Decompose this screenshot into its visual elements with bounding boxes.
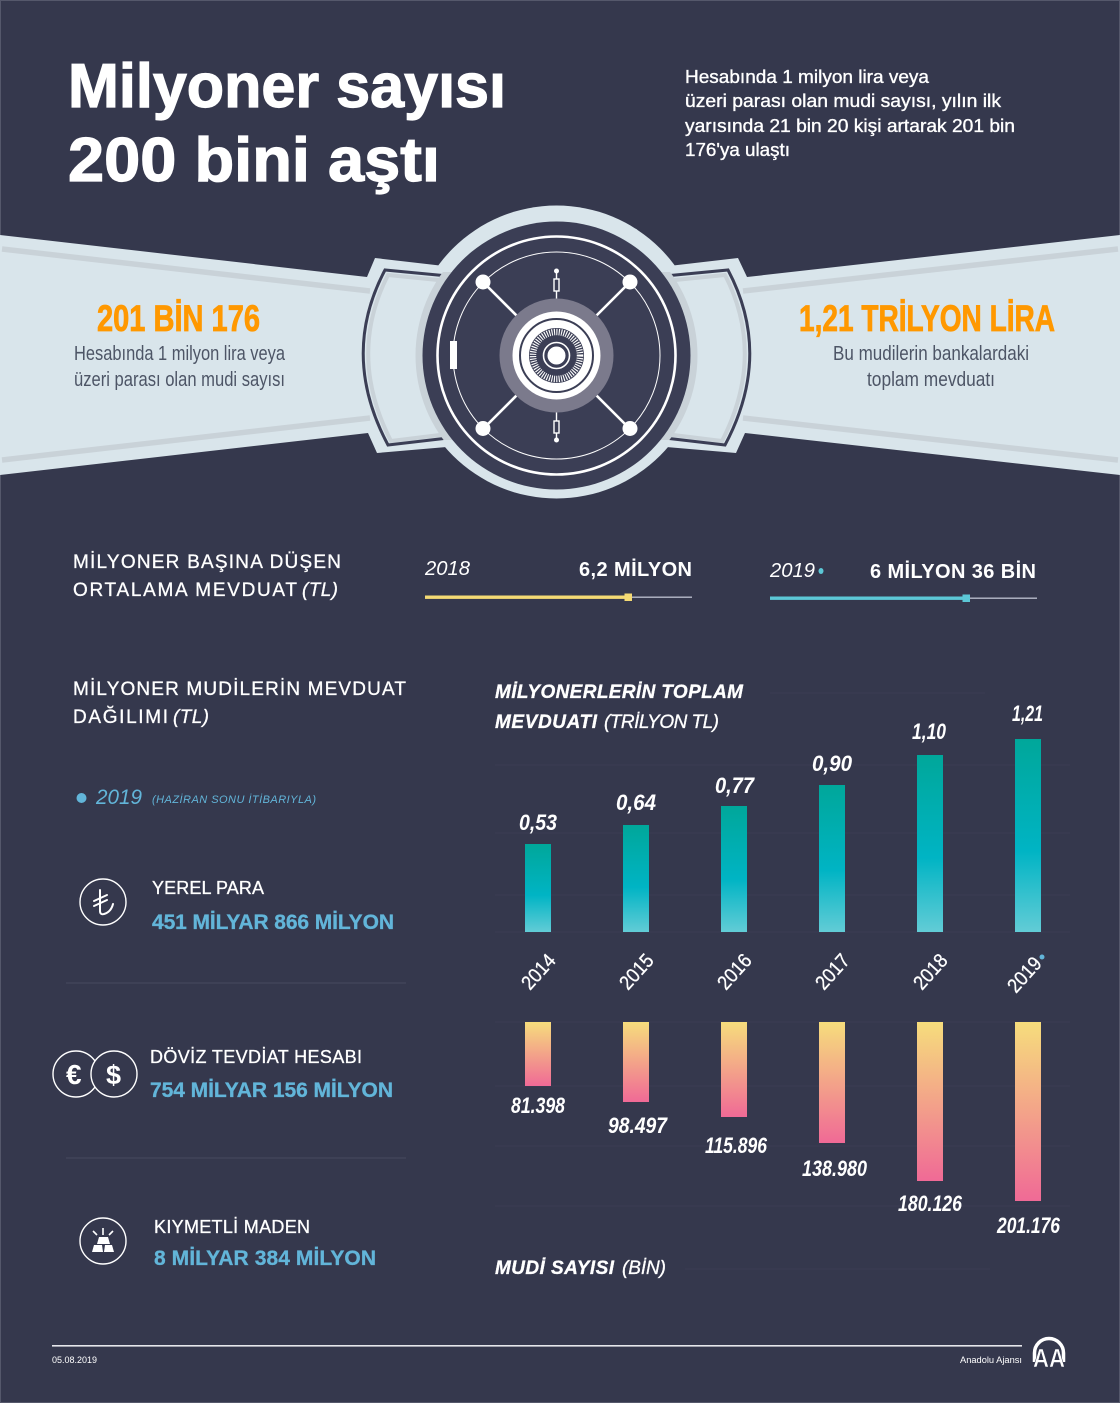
item: foreign currency: DÖVİZ TEVDİAT HESABI [150, 1047, 362, 1067]
bar chart: total deposits: 0,64 [616, 790, 656, 815]
heading: total deposits: MİLYONERLERİN TOPLAM [495, 682, 744, 703]
bar chart: total deposits: 1,21 [1012, 701, 1043, 726]
bar chart: depositor count: 115.896 [705, 1133, 768, 1158]
item: local currency: 451 MİLYAR 866 MİLYON [152, 911, 394, 934]
title [68, 52, 506, 195]
left band [0, 235, 470, 475]
left stat: Hesabında 1 milyon lira veya [74, 343, 286, 365]
heading: depositor count: MUDİ SAYISI [495, 1258, 615, 1279]
year axis labels [517, 950, 1046, 997]
icon: vault door [422, 222, 690, 490]
slider: 2018: 2018 [424, 558, 470, 580]
intro text: Hesabında 1 milyon lira veya [685, 67, 930, 87]
bar chart: depositor count: 201.176 [996, 1213, 1061, 1238]
icon: gold bars [80, 1218, 126, 1264]
footer: 05.08.2019 [52, 1355, 97, 1365]
legend: 2019: 2019 [95, 786, 142, 809]
title: Milyoner sayısı [68, 52, 506, 121]
panel: vault banner [0, 206, 1120, 498]
year axis labels: 2019 [1003, 953, 1046, 997]
bar chart: total deposits: 0,53 [519, 810, 557, 835]
left stat [74, 298, 286, 391]
title: 200 bini aştı [68, 126, 440, 195]
heading: total deposits: (TRİLYON TL) [604, 712, 719, 733]
icon: Anadolu Ajansı logo: AA [1033, 1343, 1065, 1373]
heading: deposit distribution: (TL) [173, 707, 209, 728]
item: precious metal [80, 1217, 376, 1270]
item: precious metal: 8 MİLYAR 384 MİLYON [154, 1247, 376, 1270]
item: local currency: YEREL PARA [152, 878, 264, 898]
heading: deposit distribution: DAĞILIMI [73, 706, 168, 728]
slider: 2018 [424, 558, 692, 601]
year axis labels: 2014 [517, 950, 560, 994]
bar chart: depositor count: 138.980 [802, 1156, 868, 1181]
footer: Anadolu Ajansı [960, 1355, 1022, 1365]
icon: euro and dollar: $ [106, 1060, 121, 1090]
right stat [799, 298, 1055, 391]
icon: lira [80, 879, 126, 925]
left stat: 201 BİN 176 [97, 298, 260, 339]
year axis labels: 2018 [909, 950, 952, 994]
heading: total deposits: MEVDUATI [495, 712, 598, 733]
year axis labels: 2016 [713, 950, 756, 994]
vault outer ring [410, 206, 703, 498]
bar chart: depositor count [511, 1022, 1061, 1238]
bar chart: total deposits [519, 701, 1043, 932]
slider: 2019: 6 MİLYON 36 BİN [870, 560, 1036, 583]
heading: average deposit: ORTALAMA MEVDUAT [73, 580, 297, 601]
legend: 2019: (HAZİRAN SONU İTİBARIYLA) [152, 794, 316, 806]
intro text [685, 67, 1015, 160]
bar chart: depositor count: 81.398 [511, 1093, 566, 1118]
icon: euro and dollar: € [66, 1059, 82, 1090]
intro text: üzeri parası olan mudi sayısı, yılın ilk [685, 91, 1002, 111]
year axis labels: 2015 [615, 950, 658, 994]
heading: average deposit: MİLYONER BAŞINA DÜŞEN [73, 552, 341, 573]
item: local currency [80, 878, 394, 934]
heading: depositor count: (BİN) [622, 1258, 666, 1279]
left stat: üzeri parası olan mudi sayısı [74, 369, 285, 391]
item: foreign currency [53, 1047, 393, 1102]
year axis labels: 2017 [811, 950, 854, 994]
bar chart: total deposits: 1,10 [912, 719, 947, 744]
intro text: 176'ya ulaştı [685, 140, 790, 160]
footer [52, 1338, 1065, 1373]
right stat: Bu mudilerin bankalardaki [833, 343, 1029, 365]
bar chart: total deposits: 0,77 [715, 773, 756, 798]
right stat: toplam mevduatı [867, 369, 995, 391]
icon: euro and dollar [53, 1051, 137, 1097]
heading: deposit distribution: MİLYONER MUDİLERİN MEVDUAT [73, 679, 406, 700]
bar chart: total deposits: 0,90 [812, 751, 853, 776]
slider: 2019 [769, 560, 1037, 602]
slider: 2019: 2019 [769, 560, 815, 582]
item: foreign currency: 754 MİLYAR 156 MİLYON [150, 1079, 393, 1102]
legend: 2019 [76, 786, 316, 809]
intro text: yarısında 21 bin 20 kişi artarak 201 bin [685, 116, 1015, 136]
heading: average deposit: (TL) [302, 580, 338, 601]
bar chart: depositor count: 98.497 [608, 1113, 669, 1138]
heading: deposit distribution [73, 679, 406, 728]
heading: depositor count [495, 1258, 666, 1279]
item: precious metal: KIYMETLİ MADEN [154, 1217, 310, 1237]
slider: 2018: 6,2 MİLYON [579, 558, 692, 581]
bar chart: depositor count: 180.126 [898, 1191, 963, 1216]
heading: total deposits [495, 682, 744, 733]
right band [643, 235, 1120, 475]
heading: average deposit [73, 552, 341, 601]
